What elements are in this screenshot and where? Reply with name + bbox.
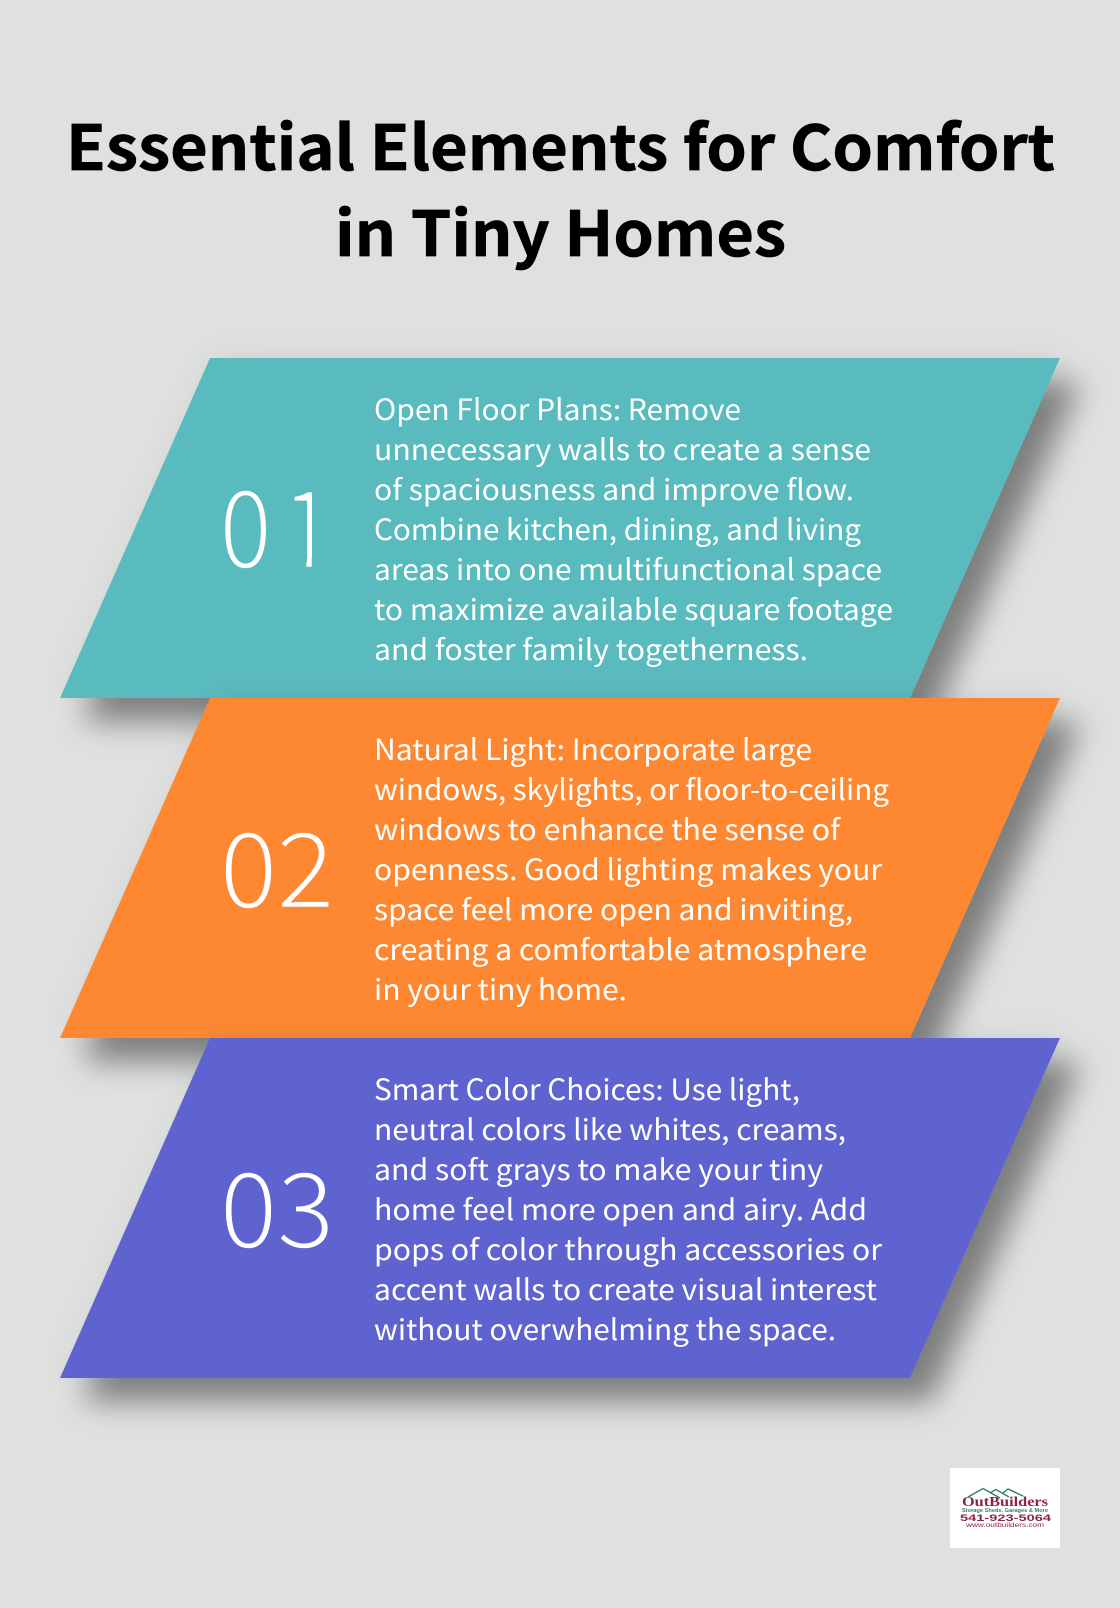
- text block: smart color choices: [374, 1067, 883, 1349]
- text block: smart color choices: and soft grays to make your tiny: [374, 1147, 823, 1189]
- text block: natural light: windows, skylights, or floor-to-ceiling: [374, 767, 889, 809]
- panel: 03 smart color choices: [60, 1038, 1060, 1378]
- text block: natural light: Natural Light: Incorporate large: [374, 727, 812, 769]
- text block: open floor plans: areas into one multifunctional space: [374, 547, 882, 589]
- text block: open floor plans: [374, 387, 893, 669]
- title: [66, 98, 1055, 274]
- text block: natural light: openness. Good lighting makes your: [374, 847, 883, 889]
- text block: open floor plans: of spaciousness and improve flow.: [374, 467, 854, 509]
- number 03: 03: [220, 1128, 334, 1277]
- number 02: 02: [220, 788, 334, 937]
- panel shape: purple parallelogram: [60, 1038, 1060, 1378]
- text block: open floor plans: unnecessary walls to create a sense: [374, 427, 871, 469]
- text block: smart color choices: home feel more open and airy. Add: [374, 1187, 867, 1229]
- logo: OutBuilders: OutBuilders: [962, 1495, 1049, 1510]
- text block: natural light: creating a comfortable atmosphere: [374, 927, 867, 969]
- number 01: 01: [220, 448, 333, 597]
- text block: smart color choices: without overwhelming the space.: [374, 1307, 836, 1349]
- panel: 01 open floor plans: [60, 358, 1060, 698]
- icon: roof lines: [968, 1488, 1023, 1498]
- text block: open floor plans: and foster family togetherness.: [374, 627, 808, 669]
- logo: OutBuilders: 541-923-5064: [960, 1513, 1051, 1523]
- text block: open floor plans: Open Floor Plans: Remove: [374, 387, 741, 429]
- text block: natural light: windows to enhance the sense of: [374, 807, 842, 849]
- text block: natural light: in your tiny home.: [374, 967, 627, 1009]
- text block: smart color choices: accent walls to create visual interest: [374, 1267, 877, 1309]
- text block: natural light: space feel more open and inviting,: [374, 887, 853, 929]
- title: in Tiny Homes: [335, 184, 786, 274]
- title: Essential Elements for Comfort: [66, 98, 1055, 188]
- text block: smart color choices: neutral colors like whites, creams,: [374, 1107, 846, 1149]
- text block: natural light: [374, 727, 889, 1009]
- panel: 02 natural light: [60, 698, 1060, 1038]
- text block: smart color choices: Smart Color Choices: Use light,: [374, 1067, 800, 1109]
- text block: open floor plans: to maximize available square footage: [374, 587, 893, 629]
- logo: OutBuilders: Storage Sheds, Garages & More: [962, 1508, 1048, 1514]
- logo: OutBuilders: [950, 1468, 1060, 1548]
- panel shape: orange parallelogram: [60, 698, 1060, 1038]
- panel shape: teal parallelogram: [60, 358, 1060, 698]
- logo: OutBuilders: www.outbuilders.com: [965, 1523, 1044, 1529]
- text block: smart color choices: pops of color through accessories or: [374, 1227, 883, 1269]
- text block: open floor plans: Combine kitchen, dining, and living: [374, 507, 861, 549]
